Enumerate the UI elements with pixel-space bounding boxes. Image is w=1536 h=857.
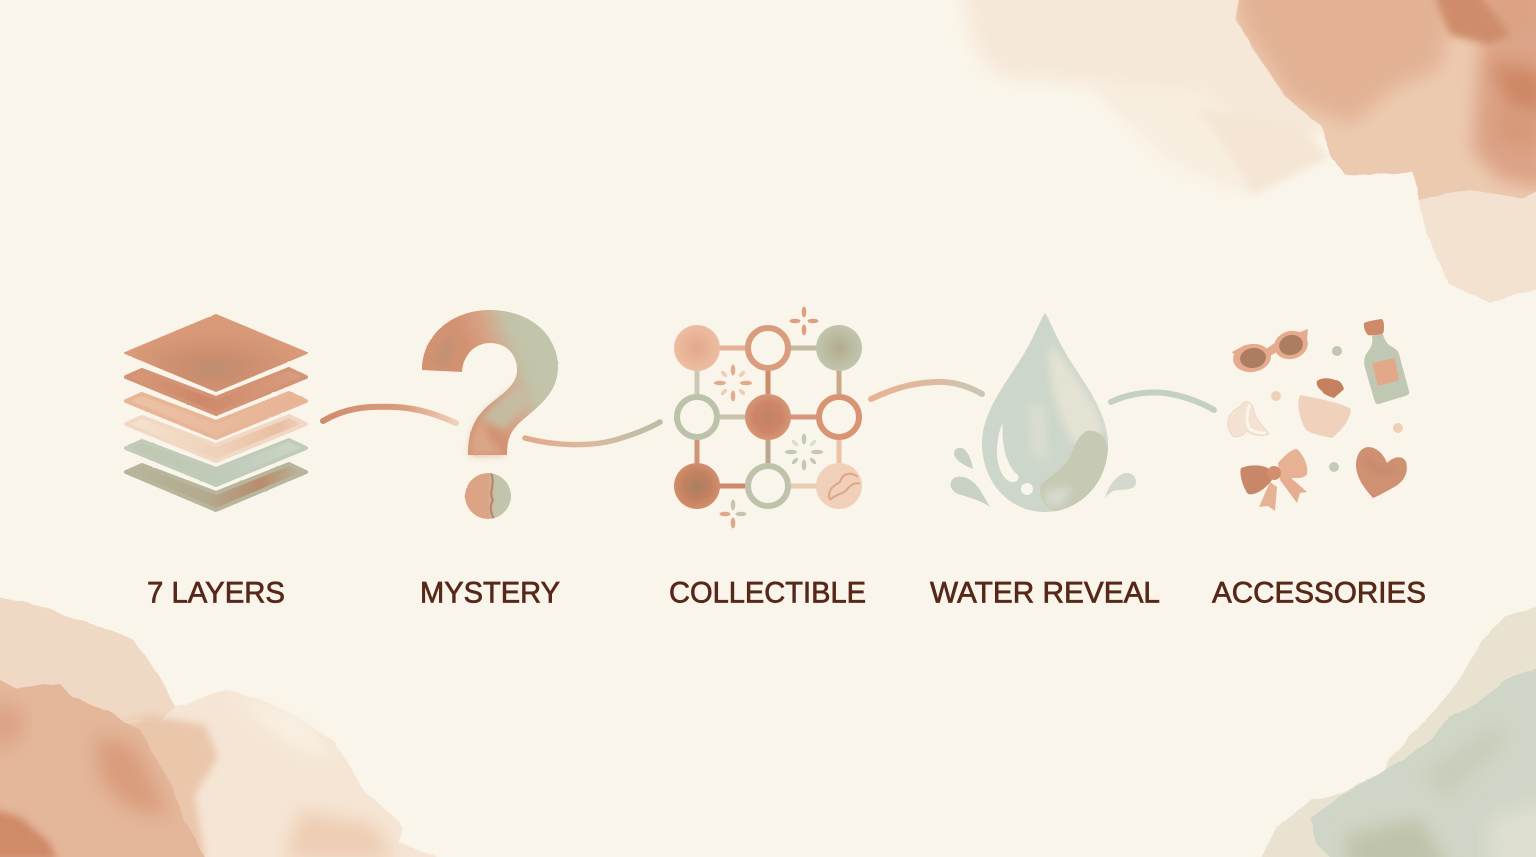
node: sage ring bottom	[748, 466, 788, 506]
perfume cap	[1317, 378, 1344, 398]
sparkle: right burst	[785, 434, 823, 470]
sparkle: bottom	[720, 500, 746, 528]
sparkle: left burst	[714, 364, 752, 402]
layer: pale chevron	[126, 416, 306, 461]
node stain	[829, 474, 860, 500]
splash: right droplet	[1105, 473, 1136, 498]
icon: collectible grid	[674, 306, 862, 528]
layer: top diamond	[125, 315, 307, 391]
bow	[1240, 449, 1307, 511]
splash: small left droplet	[954, 448, 973, 469]
arrow: mystery to collectible	[525, 422, 660, 445]
arrow: layers to mystery	[323, 407, 456, 423]
label: 7 layers: 7 LAYERS	[147, 576, 285, 610]
node: clay ring right	[819, 397, 859, 437]
icon: seven layers stack	[125, 315, 307, 510]
node: terracotta circle	[745, 394, 791, 440]
layer: sage and clay chevron	[126, 464, 306, 510]
label: mystery: MYSTERY	[420, 576, 560, 610]
heart shading	[1367, 460, 1392, 472]
question mark dot	[465, 473, 511, 520]
icon: question mark	[422, 310, 558, 520]
node: clay ring	[748, 328, 788, 368]
decorative dot sage top	[1332, 346, 1342, 356]
question mark stem sage	[480, 385, 530, 430]
drop small highlight	[1021, 483, 1033, 495]
perfume cup	[1298, 395, 1351, 438]
layer: terracotta chevron	[126, 369, 306, 414]
heart	[1356, 447, 1407, 498]
question mark stem tint	[470, 418, 505, 455]
node: sage ring	[677, 397, 717, 437]
question mark hook smudge	[432, 335, 455, 365]
pale shell	[1228, 402, 1269, 437]
decorative dot peach left	[1271, 391, 1281, 401]
arrow: collectible to water reveal	[871, 382, 982, 399]
node: peach circle	[674, 325, 720, 371]
question mark body	[422, 310, 558, 455]
sunglasses	[1231, 327, 1311, 375]
watercolor wash: bottom left	[0, 597, 440, 857]
watercolor wash: bottom right	[1260, 605, 1536, 857]
drop highlight	[997, 423, 1018, 482]
icon: water drop	[951, 313, 1136, 512]
label: water reveal: WATER REVEAL	[930, 576, 1160, 610]
decorative dot peach right	[1393, 423, 1403, 433]
node: sage circle	[816, 325, 862, 371]
node: dark terracotta circle	[674, 463, 720, 509]
layer: peach chevron	[126, 393, 306, 438]
decorative dot sage bottom	[1329, 462, 1339, 472]
sparkle: top right	[790, 306, 818, 336]
layer: light sage chevron	[126, 440, 306, 485]
grid connectors	[697, 348, 839, 486]
icon: accessories cluster	[1228, 319, 1409, 511]
arrow: water reveal to accessories	[1111, 392, 1214, 410]
bottle	[1364, 319, 1409, 404]
drop wash details	[1028, 345, 1108, 512]
label: accessories: ACCESSORIES	[1212, 576, 1426, 610]
splash: large left droplet	[951, 477, 990, 507]
drop body	[982, 313, 1108, 512]
label: collectible: COLLECTIBLE	[669, 576, 866, 610]
node: pale peach circle	[816, 463, 862, 509]
watercolor wash: top right	[960, 0, 1536, 303]
